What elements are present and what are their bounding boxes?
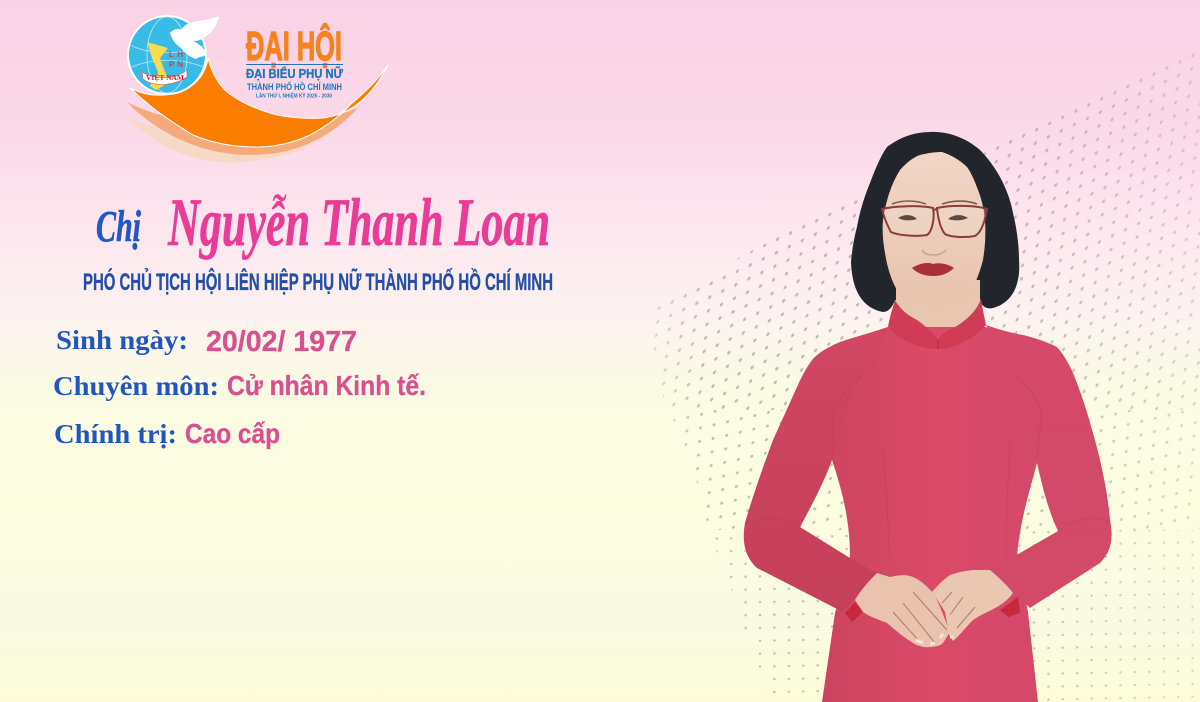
glasses bbox=[882, 206, 987, 237]
dress torso bbox=[822, 327, 1038, 702]
eyes and brows bbox=[892, 201, 977, 220]
halftone dot pattern bbox=[640, 40, 1200, 702]
hands bbox=[855, 570, 1013, 647]
logo globe: PN bbox=[169, 60, 183, 69]
logo dove bbox=[170, 16, 219, 59]
birth date row bbox=[56, 325, 357, 358]
logo heading: ĐẠI HỘI bbox=[246, 23, 342, 69]
logo globe: VIỆT NAM bbox=[146, 74, 184, 82]
cuffs bbox=[845, 597, 1020, 622]
logo term line: LẦN THỨ I, NHIỆM KỲ 2025 - 2030 bbox=[256, 92, 332, 100]
name: Nguyễn Thanh Loan bbox=[167, 184, 550, 260]
logo subheading: ĐẠI BIỂU PHỤ NỮ bbox=[246, 66, 344, 81]
hair bbox=[851, 132, 1019, 312]
logo swoosh bbox=[127, 58, 388, 163]
left sleeve bbox=[744, 327, 888, 612]
right sleeve bbox=[986, 325, 1112, 608]
job title: PHÓ CHỦ TỊCH HỘI LIÊN HIỆP PHỤ NỮ THÀNH PHỐ HỒ CHÍ MINH bbox=[83, 267, 553, 296]
dress seams bbox=[746, 362, 1110, 557]
logo: Đại hội đại biểu phụ nữ bbox=[127, 15, 388, 163]
logo city line: THÀNH PHỐ HỒ CHÍ MINH bbox=[247, 81, 342, 93]
politics row bbox=[54, 418, 280, 449]
portrait illustration bbox=[744, 132, 1112, 702]
politics row: Chính trị: bbox=[54, 419, 177, 449]
face bbox=[883, 152, 985, 305]
specialty row bbox=[53, 370, 426, 401]
neck bbox=[896, 280, 980, 345]
collar bbox=[888, 298, 986, 349]
birth date row: Sinh ngày: bbox=[56, 325, 188, 355]
salutation: Chị bbox=[96, 202, 142, 251]
birth date row: 20/02/ 1977 bbox=[206, 326, 357, 358]
politics row: Cao cấp bbox=[185, 418, 280, 449]
nose bbox=[922, 250, 946, 255]
specialty row: Chuyên môn: bbox=[53, 371, 219, 401]
logo globe bbox=[127, 15, 207, 95]
specialty row: Cử nhân Kinh tế. bbox=[227, 370, 426, 401]
logo divider bbox=[246, 64, 343, 66]
lips bbox=[912, 263, 954, 276]
logo globe: LH bbox=[169, 50, 183, 59]
